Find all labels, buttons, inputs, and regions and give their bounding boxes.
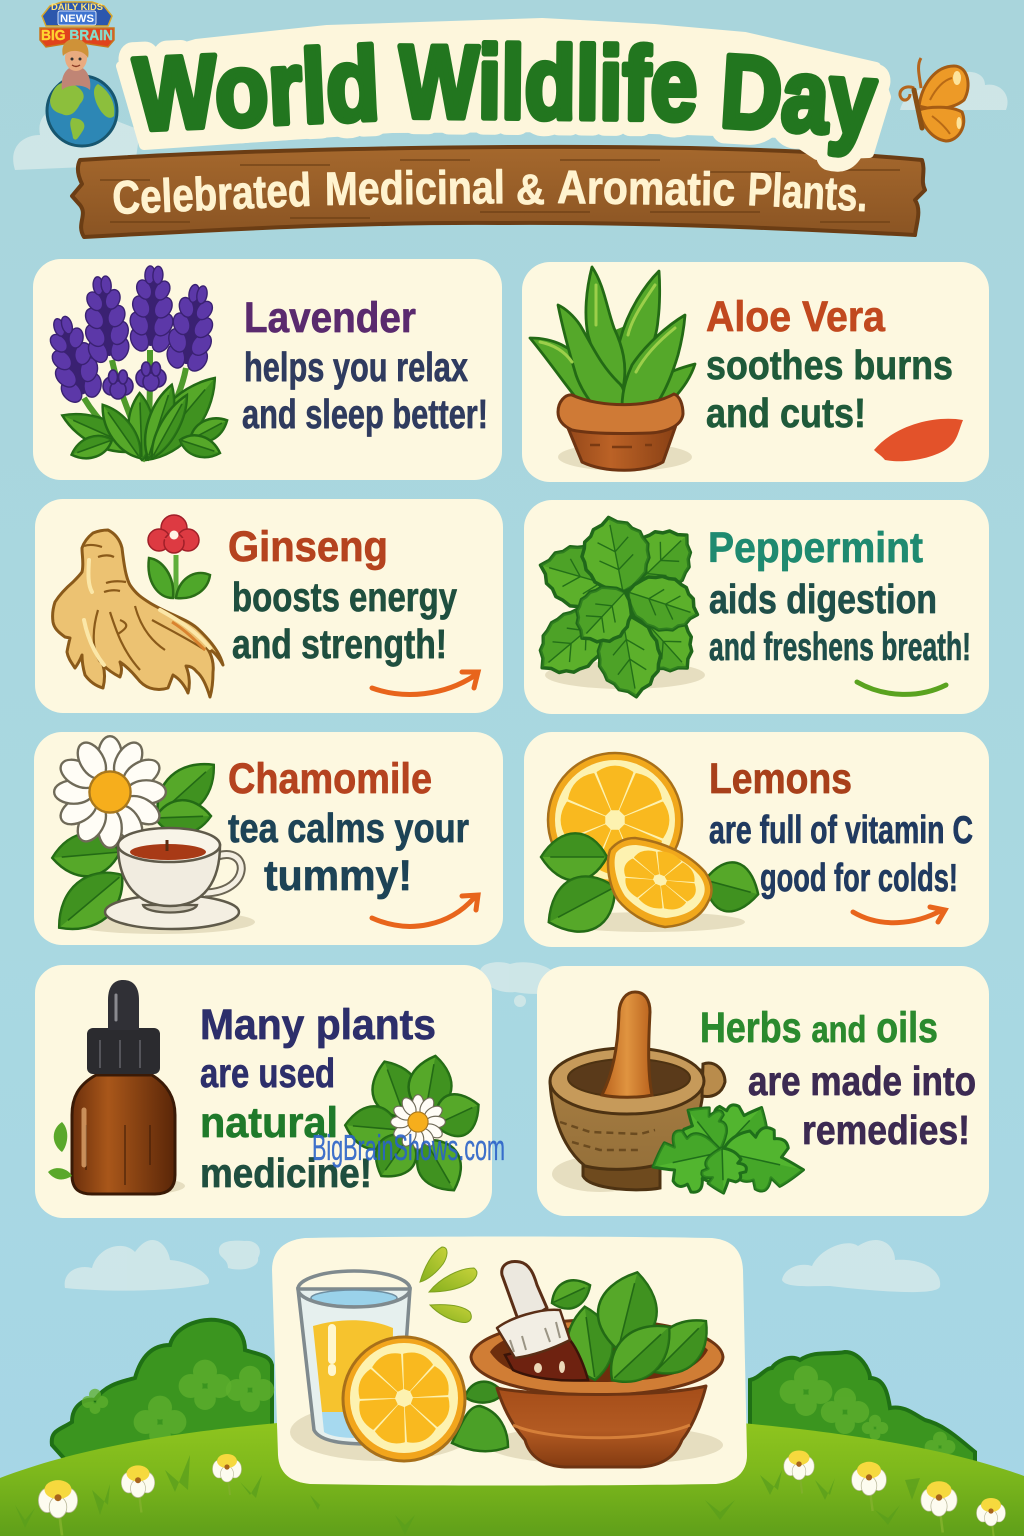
- clouds: [13, 72, 1008, 1292]
- watermark: BigBrainShows.com: [312, 1127, 505, 1168]
- text: ginseng: and strength!: [232, 621, 447, 667]
- text: herbs and oils: are made into: [748, 1058, 976, 1104]
- icon: Big Brain logo: [40, 2, 114, 47]
- panel: ginseng: [35, 499, 503, 713]
- banner subtitle: &: [516, 166, 545, 214]
- text: natural medicine: natural: [200, 1099, 338, 1147]
- title backing: [121, 23, 886, 157]
- title backing: Day: [718, 33, 879, 157]
- icon: peppermint: [524, 511, 708, 702]
- bushes: [52, 1320, 975, 1468]
- text: natural medicine: are used: [200, 1050, 335, 1096]
- title lettering: World: [132, 26, 382, 152]
- icon: dropper bottle: [48, 980, 185, 1195]
- grass tufts: [15, 1455, 920, 1535]
- text: natural medicine: Many plants: [200, 1001, 436, 1049]
- text: aloe vera: and cuts!: [706, 390, 866, 436]
- panel: herbs and oils: [537, 966, 989, 1216]
- icon: mascot boy: [62, 39, 90, 90]
- text: lavender: [242, 294, 488, 437]
- icon: green splash: [420, 1247, 477, 1323]
- title lettering: Day: [718, 33, 879, 157]
- text: lavender: helps you relax: [244, 344, 468, 390]
- banner subtitle: Medicinal: [325, 160, 505, 215]
- icon: red leaf: [874, 419, 963, 461]
- text: herbs and oils: Herbs and oils: [700, 1004, 938, 1052]
- text: chamomile: [228, 755, 469, 900]
- panel: lavender: [33, 259, 502, 480]
- icon: lemons: [536, 753, 765, 946]
- text: chamomile: tea calms your: [228, 805, 469, 851]
- title lettering: [132, 24, 879, 157]
- panel: peppermint: [524, 500, 989, 714]
- icon: Big Brain logo: BIG BRAIN: [41, 27, 113, 44]
- text: herbs and oils: remedies!: [802, 1107, 970, 1153]
- icon: daisy with leaves: [343, 1052, 488, 1201]
- panel: chamomile: [34, 732, 503, 945]
- text: peppermint: Peppermint: [708, 524, 923, 572]
- arrow: orange swoosh: [853, 907, 945, 923]
- icon: mortar and pestle: [550, 992, 810, 1201]
- right bush: [750, 1352, 975, 1468]
- text: aloe vera: [706, 293, 953, 436]
- icon: globe: [47, 76, 117, 146]
- text: lavender: and sleep better!: [242, 391, 488, 437]
- text: aloe vera: Aloe Vera: [706, 293, 886, 341]
- title: [121, 23, 886, 157]
- icon: pot with herbs and dropper: [452, 1262, 723, 1467]
- banner subtitle: Plants.: [746, 162, 869, 221]
- title lettering: Wildlife: [399, 24, 698, 142]
- panel: lemons: [524, 732, 989, 947]
- text: herbs and oils: [700, 1004, 976, 1153]
- icon: logo and globe mascot: [40, 2, 117, 146]
- text: ginseng: Ginseng: [228, 523, 388, 571]
- text: chamomile: tummy!: [264, 852, 412, 900]
- banner subtitle: Aromatic: [557, 160, 736, 215]
- icon: butterfly: [900, 58, 968, 141]
- icon: chamomile tea: [45, 736, 255, 945]
- icon: Big Brain logo: NEWS: [60, 13, 94, 25]
- left bush: [52, 1320, 274, 1465]
- text: peppermint: aids digestion: [709, 576, 937, 622]
- text: natural medicine: medicine!: [200, 1150, 372, 1196]
- decorative green swoosh: [857, 682, 946, 694]
- banner subtitle: Celebrated: [111, 163, 312, 224]
- icon: Big Brain logo: DAILY KIDS: [51, 2, 103, 12]
- text: chamomile: Chamomile: [228, 755, 432, 803]
- arrow: orange swoosh: [372, 672, 478, 694]
- grassy hill: [0, 1410, 1024, 1536]
- arrow: orange swoosh: [372, 895, 478, 926]
- text: lavender: Lavender: [244, 294, 416, 342]
- title backing: World: [132, 26, 382, 152]
- text: peppermint: [708, 524, 971, 669]
- meadow flowers: [38, 1450, 1006, 1536]
- panel: natural medicine: [35, 965, 505, 1218]
- icon: ginseng root: [53, 515, 223, 697]
- text: aloe vera: soothes burns: [706, 342, 953, 388]
- banner: wooden sign: [72, 147, 925, 237]
- text: lemons: [709, 755, 973, 900]
- banner subtitle: [111, 160, 869, 224]
- text: natural medicine: [200, 1001, 436, 1196]
- icon: lavender plant: [36, 265, 232, 472]
- text: ginseng: [228, 523, 457, 667]
- text: lemons: Lemons: [709, 755, 852, 803]
- title backing: Wildlife: [399, 24, 698, 142]
- icon: lemon slice: [343, 1337, 465, 1461]
- panel: bottom illustration: [272, 1236, 747, 1486]
- text: ginseng: boosts energy: [232, 574, 457, 620]
- panel: aloe vera: [522, 262, 989, 482]
- icon: aloe plant: [530, 267, 695, 471]
- icon: juice glass: [290, 1271, 474, 1461]
